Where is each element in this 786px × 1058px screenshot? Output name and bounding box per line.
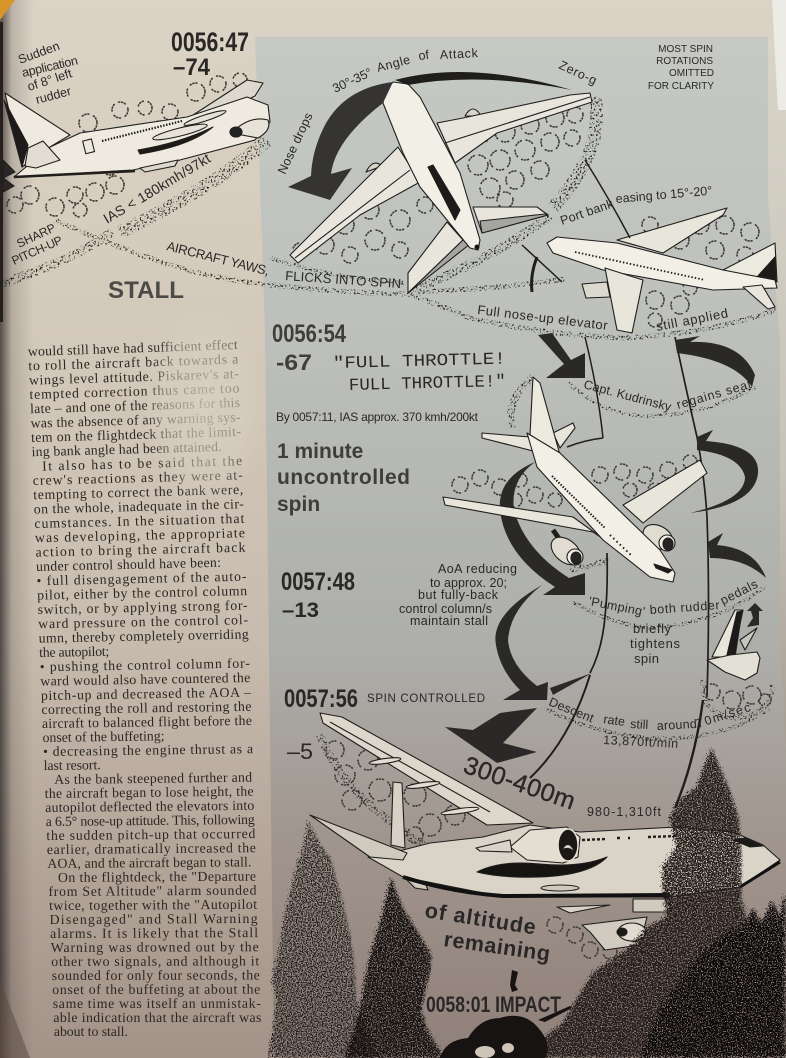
label: aircraft yaws: AIRCRAFT YAWS,: [165, 238, 271, 278]
body text column: alarms. It is likely that the Stall: [50, 925, 258, 941]
body text column: crew's reactions as they were at-: [33, 467, 243, 488]
body text column: able indication that the aircraft was: [53, 1010, 261, 1025]
label: briefly tightens spin: briefly: [633, 621, 672, 636]
timestamp 0056:47: –74: [173, 54, 211, 81]
label: 300-400m altitude: 980-1,310ft: [587, 805, 662, 819]
body text column: onset of the buffeting;: [42, 728, 165, 745]
body text column: was developing, the appropriate: [35, 525, 245, 545]
labels: full nose-up elevator: [477, 302, 729, 334]
label: sudden application of left rudder: [16, 39, 79, 107]
body text column: It also has to be said that the: [42, 453, 242, 474]
timestamp 0056:54: 0056:54: [272, 320, 346, 348]
body text column: Disengaged" and Stall Warning: [50, 911, 258, 927]
body text column: about to stall.: [54, 1024, 128, 1039]
aircraft 1: sudden rudder: [3, 80, 270, 192]
quote: full throttle: "FULL THROTTLE!: [333, 350, 506, 374]
labels: full nose-up elevator: Full nose-up elevator: [477, 302, 609, 333]
body text column: same time was itself an unmistak-: [53, 996, 261, 1011]
label: port bank easing: [558, 184, 713, 228]
label: Capt. Kudrinsky: [582, 377, 753, 414]
tree: centre dark: [345, 877, 445, 1058]
label: port bank easing: easing to 15°-20°: [615, 184, 713, 206]
label: port bank easing: Port bank: [558, 196, 616, 228]
label: Capt. Kudrinsky: Capt. Kudrinsky: [582, 377, 674, 414]
label: 300-400m altitude: [460, 751, 662, 819]
timestamp 0058:01 impact: 0058:01 IMPACT: [426, 992, 561, 1017]
note: most spin rotations omitted: ROTATIONS: [656, 56, 713, 67]
body text column: on the whole, inadequate in the cir-: [34, 496, 244, 517]
label: aircraft yaws: FLICKS INTO SPIN: [285, 268, 402, 291]
body text column: • full disengagement of the auto-: [36, 569, 247, 588]
heading: stall: STALL: [108, 277, 184, 304]
label: sharp pitch-up: SHARP: [14, 221, 58, 251]
label: of altitude remaining: remaining: [442, 927, 552, 966]
timestamp 0056:47: 0056:47: [171, 27, 249, 57]
heading: 1 minute uncontrolled spin: [277, 440, 410, 516]
label: descent rate: around: [656, 717, 697, 733]
body text column: twice, together with the "Autopilot: [49, 897, 257, 913]
timestamp 0056:54: -67: [276, 350, 312, 375]
note: most spin rotations omitted: [648, 44, 714, 92]
quote: full throttle: FULL THROTTLE!": [349, 373, 506, 396]
label: AoA reducing: [399, 562, 517, 628]
body text column: autopilot deflected the elevators into: [45, 798, 254, 815]
aircraft 3: port bank easing: [547, 208, 777, 333]
body text column: umn, thereby completely overriding: [39, 627, 249, 646]
label: IAS: IAS < 180kmh/97kt: [100, 150, 213, 227]
body text column: tempting to correct the bank were,: [33, 482, 243, 502]
body text column: switch, or by applying strong for-: [37, 598, 248, 617]
tree: right large: [520, 747, 786, 1058]
body text column: from Set Altitude" alarm sounded: [48, 883, 257, 899]
label: Capt. Kudrinsky: regains seat: [675, 377, 753, 412]
body text column: the aircraft began to lose height, the: [45, 784, 254, 801]
label: descent rate: rate: [603, 712, 626, 729]
tree: left pale: [268, 820, 378, 1058]
timestamp 0057:48: –13: [282, 599, 319, 622]
timestamp 0057:56: –5: [287, 739, 313, 764]
aircraft 5: spin controlled: [310, 713, 780, 950]
label: pumping rudder pedals: 'Pumping': [587, 594, 646, 619]
body text column: the autopilot;: [39, 644, 109, 660]
timestamp 0056:47: [171, 27, 249, 81]
body text column: tempted correction thus came too: [29, 380, 240, 402]
body text column: • pushing the control column for-: [40, 656, 250, 674]
body text column: to roll the aircraft back towards a: [28, 351, 238, 373]
label: angle of attack: Angle: [375, 53, 412, 75]
label: AoA reducing: AoA reducing: [438, 562, 517, 576]
thin trajectory lines: [522, 160, 708, 808]
label: aircraft yaws: [165, 238, 402, 291]
label: of altitude remaining: [423, 898, 552, 966]
tree mass: right dark: [640, 893, 786, 1058]
label: AoA reducing: maintain stall: [410, 614, 488, 628]
label: pumping rudder pedals: pedals: [718, 577, 760, 608]
body text column: would still have had sufficient effect: [28, 337, 238, 359]
body text column: sounded for only four seconds, the: [52, 967, 260, 983]
label: descent rate: 70m/sec: [695, 700, 752, 731]
label: angle of attack: 30°-35°: [330, 65, 374, 96]
note: most spin rotations omitted: OMITTED: [669, 68, 714, 79]
body text column: earlier, dramatically increased the: [47, 840, 256, 857]
timestamp 0057:56: 0057:56: [284, 685, 358, 713]
body text column: late – and one of the reasons for this: [30, 395, 240, 416]
body text column: correcting the roll and restoring the: [41, 699, 252, 717]
label: 300-400m altitude: 300-400m: [460, 751, 579, 815]
label: sharp pitch-up: PITCH-UP: [10, 233, 65, 268]
labels: full nose-up elevator: still applied: [655, 305, 729, 334]
body text column: the sudden pitch-up that occurred: [46, 826, 256, 843]
label: AoA reducing: control column/s: [399, 602, 492, 616]
body text column: As the bank steepened further and: [54, 770, 252, 787]
label: briefly tightens spin: [630, 621, 680, 666]
label: descent rate: still: [630, 717, 649, 732]
timestamp 0057:56: SPIN CONTROLLED: [367, 693, 485, 705]
body text column: other two signals, and although it: [51, 953, 259, 969]
label: IAS by 0057:11: By 0057:11, IAS approx. 370 kmh/200kt: [276, 410, 479, 424]
label: descent rate: [547, 695, 752, 751]
body text column: aircraft to balanced flight before the: [42, 713, 252, 731]
body text column: Warning was drowned out by the: [51, 939, 259, 955]
aircraft 2: nose drops: [290, 82, 592, 293]
label: angle of attack: [330, 46, 479, 96]
label: descent rate: 13,870ft/min: [603, 733, 679, 751]
label: AoA reducing: but fully-back: [418, 588, 499, 602]
label: sudden application of left rudder: rudder: [34, 84, 73, 107]
label: pumping rudder pedals: [587, 577, 760, 619]
body text column: ing bank angle had been attained.: [31, 439, 222, 459]
label: zero-g: Zero-g: [557, 58, 599, 88]
body text column: action to bring the aircraft back: [35, 540, 246, 560]
body text column: a 6.5° nose-up attitude. This, following: [46, 812, 255, 829]
body text column: wings level attitude. Piskarev's at-: [29, 366, 239, 388]
body text column: pilot, either by the control column: [37, 583, 247, 603]
body text column: pitch-up and decreased the AOA –: [41, 685, 251, 703]
body text column: tem on the flightdeck that the limit-: [31, 424, 242, 445]
label: of altitude remaining: of altitude: [423, 898, 538, 939]
label: briefly tightens spin: spin: [634, 651, 659, 666]
heading: 1 minute uncontrolled spin: uncontrolled: [277, 466, 410, 489]
heading: 1 minute uncontrolled spin: spin: [277, 493, 320, 516]
label: briefly tightens spin: tightens: [630, 636, 680, 651]
aircraft 4: spinning: [443, 377, 707, 582]
note: most spin rotations omitted: FOR CLARITY: [648, 81, 714, 92]
label: descent rate: Descent: [547, 695, 596, 726]
heading: 1 minute uncontrolled spin: 1 minute: [277, 440, 363, 463]
body text column: last resort.: [44, 757, 101, 773]
timestamp 0056:54: [272, 320, 346, 375]
spiral arrows: [445, 333, 766, 763]
note: most spin rotations omitted: MOST SPIN: [658, 44, 713, 55]
label: sudden application of left rudder: of 8° left: [26, 66, 74, 94]
body text column: [28, 337, 261, 1039]
arrow: nose drops curve: [288, 72, 572, 200]
body text column: cumstances. In the situation that: [34, 511, 245, 531]
body text column: under control should have been:: [36, 555, 221, 574]
label: sudden application of left rudder: application: [21, 53, 79, 80]
body text column: On the flightdeck, the "Departure: [58, 869, 256, 885]
timestamp 0057:48: [281, 568, 355, 622]
aircraft: rudder detail: [707, 610, 760, 680]
body text column: onset of the buffeting at about the: [52, 982, 260, 997]
glare on body text: [143, 305, 267, 505]
timestamp 0057:48: 0057:48: [281, 568, 355, 596]
label: angle of attack: of: [418, 48, 430, 63]
label: pumping rudder pedals: both rudder: [649, 598, 720, 617]
timestamp 0057:56: [284, 685, 485, 764]
body text column: ward would also have countered the: [40, 670, 250, 689]
body text column: • decreasing the engine thrust as a: [43, 741, 253, 759]
label: sudden application of left rudder: Sudden: [16, 39, 62, 67]
label: angle of attack: Attack: [439, 46, 479, 62]
body text column: ward pressure on the control col-: [38, 612, 249, 631]
label: AoA reducing: to approx. 20;: [430, 576, 507, 590]
quote: full throttle: [333, 350, 506, 396]
body text column: AOA, and the aircraft began to stall.: [47, 854, 251, 871]
impact blob: [440, 970, 572, 1058]
label: nose drops: Nose drops: [275, 111, 316, 176]
stipple bands: [2, 97, 777, 855]
body text column: was the absence of any warning sys-: [30, 409, 241, 431]
